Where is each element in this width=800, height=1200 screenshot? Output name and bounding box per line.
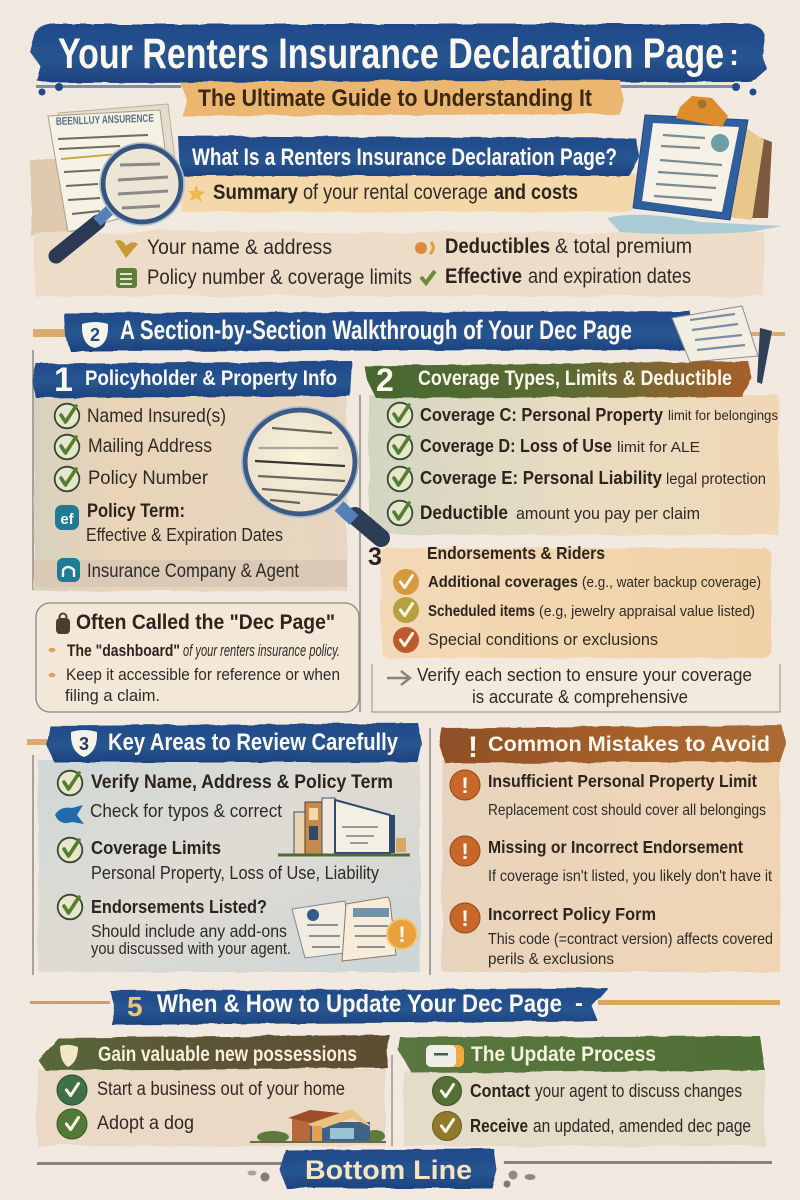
check item: contact agent: [432, 1076, 742, 1106]
check item: coverage limits: Personal Property, Loss of Use, Liability: [91, 862, 380, 883]
icon: shield: [60, 1045, 78, 1067]
panel: the update process: [398, 1036, 765, 1146]
item: check for typos: Check for typos & correct: [90, 800, 282, 821]
arrow: [387, 671, 410, 685]
check item: receive update: Receive: [470, 1116, 528, 1136]
callout: often called the dec page: of your renters insurance policy.: [183, 642, 340, 660]
check item: coverage C: Coverage C: Personal Property: [420, 405, 663, 425]
check item: coverage D: [388, 435, 700, 459]
subtitle ribbon: The Ultimate Guide to Understanding It: [198, 85, 592, 112]
bottom line banner: [37, 1149, 772, 1188]
banner: policyholder: Policyholder & Property Info: [85, 367, 337, 390]
check item: coverage D: Coverage D: Loss of Use: [420, 436, 612, 456]
check item: start a business: Start a business out of your home: [97, 1079, 345, 1100]
icon: clipboard with documents: [607, 96, 782, 234]
section heading: when and how to update: [30, 988, 780, 1025]
mistake: missing endorsement: !: [461, 839, 469, 864]
subtitle ribbon: [180, 80, 624, 116]
check item: coverage limits: Coverage Limits: [91, 837, 221, 858]
check item: named insured: [55, 404, 226, 428]
check item: scheduled items: Scheduled items: [428, 603, 535, 620]
icon: house: [250, 1109, 386, 1143]
section heading: when and how to update: When & How to Update Your Dec Page: [157, 990, 562, 1018]
summary ribbon: of your rental coverage: [303, 181, 488, 204]
icon: name: [115, 240, 138, 258]
icon: stack of policy documents: BEENLLUY ANSURENCE: [56, 113, 154, 128]
callout: verify each section: Verify each section to ensure your coverage: [417, 665, 752, 685]
check item: special conditions: Special conditions or exclusions: [428, 631, 658, 649]
banner: common mistakes: !: [468, 731, 478, 764]
panel: what the page lists: [34, 232, 764, 296]
banner: update process: [398, 1036, 765, 1073]
panel: gain valuable new possessions: [37, 1035, 390, 1146]
icon: deductibles: [415, 242, 433, 254]
panel: what the page lists: Effective: [445, 265, 522, 288]
item: policy term: ef: [60, 511, 75, 528]
icon: shield three: [71, 730, 97, 757]
banner: coverage types: Coverage Types, Limits & Deductible: [418, 367, 732, 390]
panel: policyholder and property info: [32, 350, 381, 712]
mistake: incorrect policy form: [450, 903, 773, 968]
section heading: when and how to update: 5: [127, 991, 143, 1022]
check item: coverage C: [388, 403, 778, 427]
mistake: personal property limit: !: [461, 773, 469, 798]
mistake: incorrect policy form: Incorrect Policy Form: [488, 904, 656, 924]
banner: common mistakes: Common Mistakes to Avoid: [488, 733, 770, 756]
mistake: incorrect policy form: !: [461, 906, 469, 931]
check item: coverage limits: [58, 837, 380, 883]
mistake: incorrect policy form: perils & exclusions: [488, 951, 614, 968]
item: policy term: Policy Term:: [87, 500, 185, 522]
icon: star: [188, 185, 205, 202]
check item: additional coverages: (e.g., water backup coverage): [582, 574, 761, 591]
title banner: :: [729, 39, 739, 72]
banner: update process: The Update Process: [471, 1043, 656, 1066]
panel: key areas to review: [27, 723, 422, 975]
mistake: incorrect policy form: This code (=contract version) affects covered: [488, 931, 773, 948]
icon: large magnifying glass: [242, 407, 381, 538]
check item: receive update: an updated, amended dec page: [533, 1116, 751, 1136]
section heading: when and how to update: -: [575, 990, 583, 1017]
check item: endorsements listed: Should include any add-ons: [91, 921, 287, 941]
icon: dates check: [421, 271, 435, 283]
check item: adopt a dog: [57, 1109, 194, 1139]
check item: scheduled items: (e.g, jewelry appraisal value listed): [539, 604, 755, 620]
icon: stack of policy documents: [48, 104, 180, 232]
item: policy term: Effective & Expiration Dates: [86, 524, 283, 545]
heading: key areas: [47, 723, 422, 762]
callout: verify each section: [372, 664, 780, 712]
heading: key areas: Key Areas to Review Carefully: [108, 729, 398, 756]
check item: policy number: Policy Number: [88, 467, 208, 489]
icon: building and policy: [278, 798, 410, 855]
check item: coverage D: limit for ALE: [617, 439, 700, 456]
icon: documents and warning: !: [398, 922, 406, 947]
panel: what the page lists: Deductibles: [445, 235, 550, 258]
banner: policyholder: 1: [54, 361, 73, 399]
icon: shield number: [82, 322, 108, 348]
check item: coverage E: legal protection: [666, 471, 766, 488]
mistake: personal property limit: Insufficient Personal Property Limit: [488, 771, 757, 791]
check item: receive update: [432, 1112, 751, 1140]
check item: additional coverages: [393, 569, 761, 595]
check item: policy number: [55, 467, 208, 491]
check item: coverage E: Coverage E: Personal Liability: [420, 468, 662, 488]
item: insurance company: Insurance Company & Agent: [87, 561, 300, 582]
number: endorsements section: 3: [368, 543, 382, 571]
panel: what the page lists: Your name & address: [147, 236, 332, 259]
icon: policy number: [116, 268, 137, 288]
icon: magnifying glass: [56, 143, 184, 256]
check item: mailing address: Mailing Address: [88, 435, 212, 457]
mistake: missing endorsement: [450, 836, 772, 885]
check item: adopt a dog: Adopt a dog: [97, 1113, 194, 1134]
banner: gain possessions: Gain valuable new possessions: [98, 1043, 357, 1066]
callout: verify each section: is accurate & comprehensive: [472, 687, 688, 707]
callout: often called the dec page: Often Called the "Dec Page": [76, 610, 335, 634]
icon: shield number: 2: [90, 325, 100, 345]
check item: coverage C: limit for belongings: [668, 407, 778, 423]
check item: special conditions: [393, 627, 658, 653]
check item: start a business: [57, 1075, 345, 1105]
callout: often called the dec page: The "dashboard": [67, 642, 180, 660]
panel: common mistakes: [430, 725, 786, 975]
panel: what the page lists: Policy number & coverage limits: [147, 266, 412, 289]
banner: coverage types: 2: [376, 362, 394, 398]
callout: often called the dec page: Keep it accessible for reference or when: [66, 665, 340, 684]
banner: policyholder: [32, 361, 352, 399]
section heading: walkthrough: [33, 306, 785, 384]
summary ribbon: [180, 174, 640, 212]
check item: endorsements listed: Endorsements Listed?: [91, 896, 267, 917]
mistake: missing endorsement: If coverage isn't listed, you likely don't have it: [488, 868, 772, 885]
title banner: [30, 24, 766, 96]
panel: what the page lists: & total premium: [555, 235, 692, 258]
check item: coverage E: [388, 467, 766, 491]
divider: vertical: [391, 1055, 393, 1146]
check item: scheduled items: [393, 597, 755, 623]
bottom line banner: Bottom Line: [305, 1155, 472, 1185]
check item: deductible: amount you pay per claim: [516, 504, 700, 523]
icon: shield three: 3: [79, 734, 89, 754]
panel: what the page lists: and expiration dates: [528, 265, 691, 288]
icon: padlock bag: [56, 614, 70, 634]
item: policy term: [55, 500, 283, 545]
banner: what is a declaration page: What Is a Renters Insurance Declaration Page?: [192, 144, 617, 171]
panel: endorsements and riders: Endorsements & Riders: [427, 543, 605, 563]
soft intro wash: [30, 160, 90, 235]
panel: coverage types: [364, 361, 779, 535]
check item: named insured: Named Insured(s): [87, 405, 226, 427]
check item: verify name: Verify Name, Address & Policy Term: [91, 771, 393, 793]
callout: often called the dec page: [36, 603, 359, 712]
section heading: walkthrough: A Section-by-Section Walkthrough of Your Dec Page: [120, 315, 632, 345]
mistake: personal property limit: [450, 770, 766, 819]
summary ribbon: Summary: [213, 181, 298, 204]
check item: deductible: Deductible: [420, 503, 508, 524]
banner: common mistakes: [439, 725, 786, 764]
check item: contact agent: your agent to discuss changes: [535, 1081, 742, 1101]
icon: card: [426, 1045, 464, 1067]
check item: additional coverages: Additional coverages: [428, 574, 578, 591]
icon: documents and pen: [672, 306, 772, 384]
summary ribbon: and costs: [494, 181, 578, 204]
icon: documents and warning: [292, 897, 417, 961]
check item: endorsements listed: [58, 895, 291, 958]
check item: endorsements listed: you discussed with your agent.: [91, 939, 291, 958]
mistake: missing endorsement: Missing or Incorrect Endorsement: [488, 837, 743, 857]
banner: gain possessions: [38, 1035, 390, 1071]
item: check for typos: [55, 800, 282, 824]
check item: mailing address: [55, 435, 212, 459]
banner: coverage types: [364, 361, 752, 398]
check item: contact agent: Contact: [470, 1080, 530, 1101]
callout: often called the dec page: filing a claim.: [65, 686, 160, 705]
banner: what is a declaration page: [178, 136, 640, 176]
item: insurance company: [34, 558, 347, 587]
panel: endorsements and riders: [381, 543, 771, 658]
check item: deductible: [388, 501, 700, 525]
